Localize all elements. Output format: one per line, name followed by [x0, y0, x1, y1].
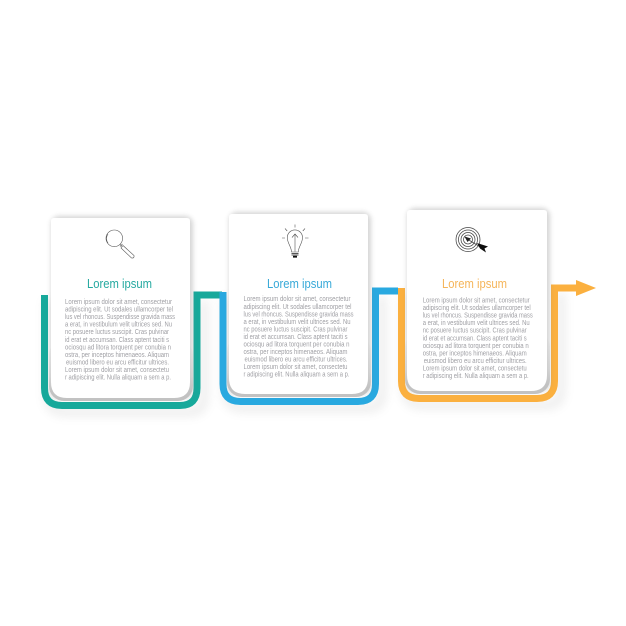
text block: euismod libero eu arcu efficitur ultrices.	[244, 357, 348, 364]
icon: target with dart	[456, 228, 488, 252]
text block: Lorem ipsum dolor sit amet, consectetur	[65, 299, 173, 306]
heading: Lorem ipsum	[267, 276, 332, 291]
text block	[423, 298, 533, 380]
panel: step 2	[227, 212, 371, 397]
path shadows	[48, 293, 561, 412]
panel: step 1	[49, 216, 193, 401]
text block: id erat et accumsan. Class aptent taciti s	[65, 337, 169, 344]
text block: ociosqu ad litora torquent per conubia n	[244, 342, 350, 348]
text block: a erat, in vestibulum velit ultrices sed. Nu	[244, 319, 351, 326]
text block: ociosqu ad litora torquent per conubia n	[65, 344, 171, 351]
text block: lus vel rhoncus. Suspendisse gravida mass	[244, 311, 354, 318]
text block: adipiscing elit. Ut sodales ullamcorper tel	[423, 305, 531, 312]
text block: nc posuere luctus suscipit. Cras pulvinar	[244, 326, 348, 333]
icon: light bulb	[282, 224, 308, 257]
text block: euismod libero eu arcu efficitur ultrices.	[424, 358, 527, 365]
blue connector line	[223, 291, 398, 402]
text block: nc posuere luctus suscipit. Cras pulvinar	[65, 329, 170, 336]
text block: euismod libero eu arcu efficitur ultrices.	[66, 359, 169, 366]
panel: step 3	[405, 208, 550, 394]
icon: magnifying glass	[106, 230, 134, 258]
text block: a erat, in vestibulum velit ultrices sed. Nu	[65, 322, 172, 329]
text block: r adipiscing elit. Nulla aliquam a sem a p.	[65, 374, 171, 382]
text block: Lorem ipsum dolor sit amet, consectetu	[65, 367, 169, 374]
heading: Lorem ipsum	[87, 276, 152, 291]
text block: r adipiscing elit. Nulla aliquam a sem a p.	[244, 372, 350, 379]
text block: id erat et accumsan. Class aptent taciti s	[423, 335, 527, 342]
orange connector arrow	[402, 280, 596, 398]
teal connector line	[44, 295, 222, 406]
heading: Lorem ipsum	[442, 276, 507, 291]
text block: adipiscing elit. Ut sodales ullamcorper tel	[244, 304, 352, 311]
text block: ostra, per inceptos himenaeos. Aliquam	[423, 350, 527, 357]
text block: ociosqu ad litora torquent per conubia n	[423, 343, 529, 350]
text block: Lorem ipsum dolor sit amet, consectetur	[244, 296, 351, 303]
text block	[65, 299, 175, 382]
text block	[244, 296, 354, 379]
text block: ostra, per inceptos himenaeos. Aliquam	[244, 349, 348, 356]
text block: Lorem ipsum dolor sit amet, consectetu	[423, 366, 527, 372]
text block: ostra, per inceptos himenaeos. Aliquam	[65, 352, 169, 359]
text block: adipiscing elit. Ut sodales ullamcorper tel	[65, 307, 173, 314]
text block: Lorem ipsum dolor sit amet, consectetur	[423, 298, 530, 304]
text block: Lorem ipsum dolor sit amet, consectetu	[244, 364, 348, 371]
text block: id erat et accumsan. Class aptent taciti s	[244, 334, 348, 341]
text block: lus vel rhoncus. Suspendisse gravida mass	[65, 314, 175, 321]
text block: r adipiscing elit. Nulla aliquam a sem a p.	[423, 373, 529, 380]
text block: a erat, in vestibulum velit ultrices sed. Nu	[423, 320, 530, 327]
text block: nc posuere luctus suscipit. Cras pulvinar	[423, 328, 527, 335]
text block: lus vel rhoncus. Suspendisse gravida mass	[423, 313, 533, 320]
